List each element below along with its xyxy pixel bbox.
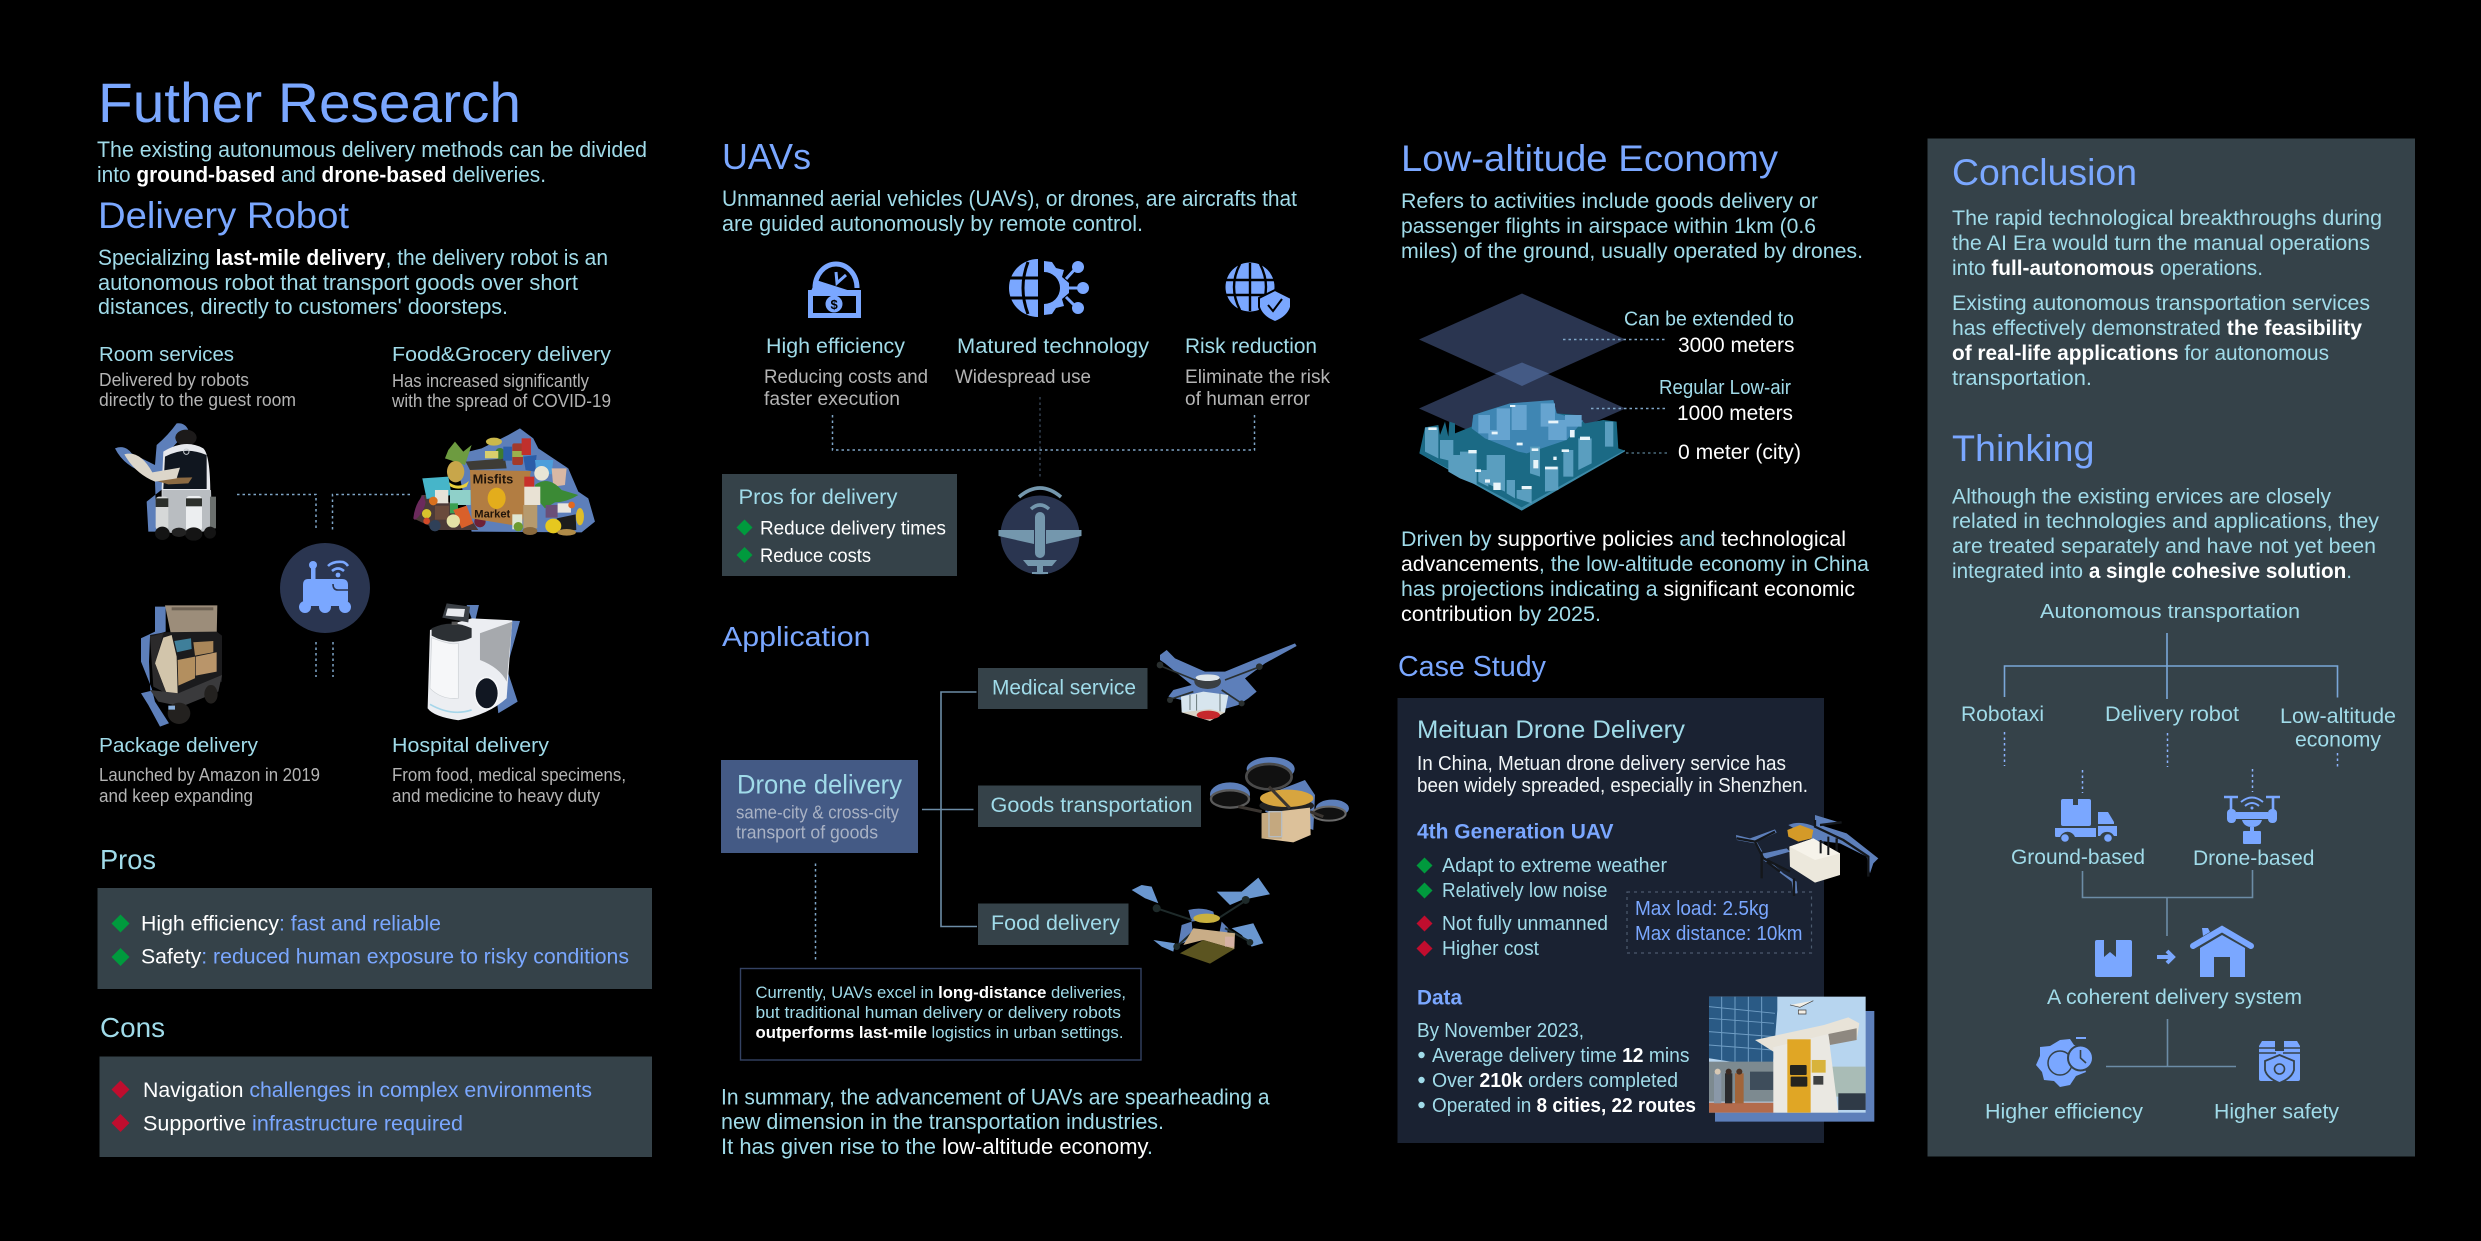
box: medical service: Medical service — [992, 676, 1136, 700]
panel: low-altitude economy column — [1398, 138, 1878, 1143]
label: food and grocery delivery: Food&Grocery delivery — [392, 343, 612, 366]
summary text: new dimension in the transportation industries. — [721, 1109, 1164, 1134]
list: data: Average delivery time 12 mins — [1432, 1045, 1690, 1067]
image: medical drone — [1157, 643, 1297, 721]
image: hospital delivery robot — [428, 603, 520, 720]
feature: risk reduction — [1185, 335, 1330, 410]
conclusion text: of real-life applications for autonomous — [1952, 341, 2329, 365]
image: goods drone — [1210, 757, 1349, 842]
conclusion text — [1952, 206, 2382, 390]
summary text: In summary, the advancement of UAVs are spearheading a — [721, 1084, 1270, 1110]
label: room services: Room services — [99, 343, 234, 366]
feature: high efficiency: faster execution — [764, 389, 900, 410]
list: data — [1417, 1020, 1696, 1117]
image: grocery pile: Misfits — [473, 472, 513, 486]
label: higher safety: Higher safety — [2214, 1100, 2339, 1124]
thinking text: Although the existing ervices are closely — [1952, 484, 2331, 508]
summary text: It has given rise to the low-altitude economy. — [721, 1134, 1153, 1159]
economy outlook text: has projections indicating a significant economic — [1401, 577, 1855, 601]
callout: last-mile note — [740, 968, 1141, 1060]
icon: drone-based — [2224, 797, 2280, 844]
icon: plane in circle — [998, 488, 1082, 574]
conclusion text: the AI Era would turn the manual operations — [1952, 231, 2370, 255]
intro text: into ground-based and drone-based deliveries. — [97, 162, 546, 187]
panel: cons list — [100, 1056, 652, 1157]
city model — [1419, 400, 1625, 511]
UAV description — [722, 186, 1297, 236]
panel: pros list: High efficiency: fast and reliable — [141, 912, 441, 936]
label: hospital delivery: Hospital delivery — [392, 734, 550, 757]
label: higher efficiency: Higher efficiency — [1985, 1100, 2144, 1124]
conclusion text: The rapid technological breakthroughs during — [1952, 206, 2382, 230]
label: ground-based: Ground-based — [2011, 846, 2145, 869]
box: goods transportation: Goods transportation — [990, 794, 1192, 817]
label: food and grocery delivery: Has increased significantly — [392, 371, 589, 391]
connectors: system to outcomes — [2106, 1019, 2236, 1066]
UAV description: are guided autonomously by remote control. — [722, 211, 1143, 236]
label: food and grocery delivery — [391, 343, 612, 411]
panel: cons list: Navigation challenges in complex environments — [143, 1078, 592, 1102]
feature: high efficiency — [764, 335, 928, 410]
image: room service robot — [115, 423, 216, 541]
panel: pros list — [98, 888, 652, 989]
low-altitude definition: passenger flights in airspace within 1km (0.6 — [1401, 214, 1816, 238]
icon: box to home — [2095, 928, 2251, 977]
list: data: By November 2023, — [1417, 1020, 1584, 1042]
box: medical service — [978, 668, 1148, 709]
label: 3000 meters — [1624, 308, 1794, 357]
label: 3000 meters: Can be extended to — [1624, 308, 1794, 330]
box: drone delivery: same-city & cross-city — [736, 802, 899, 822]
callout: last-mile note: outperforms last-mile logistics in urban settings. — [756, 1023, 1124, 1042]
image: meituan drone — [1736, 815, 1878, 896]
subheading: 4th generation UAV: 4th Generation UAV — [1417, 820, 1614, 844]
label: hospital delivery: and medicine to heavy duty — [392, 786, 600, 806]
heading: pros: Pros — [100, 844, 156, 875]
connectors: service tree — [2004, 633, 2338, 699]
callout: last-mile note: but traditional human delivery or delivery robots — [756, 1003, 1121, 1022]
label: room services — [99, 343, 296, 410]
conclusion text: into full-autonomous operations. — [1952, 256, 2263, 280]
icon: higher efficiency gear — [2036, 1038, 2093, 1087]
callout: max load and distance — [1627, 892, 1812, 953]
connectors: services to categories — [2004, 732, 2338, 793]
label: package delivery: Package delivery — [99, 734, 259, 757]
connectors: features to plane — [832, 397, 1254, 477]
label: package delivery: and keep expanding — [99, 786, 253, 806]
panel: conclusion and thinking — [1928, 138, 2415, 1156]
icon: high efficiency: $ — [830, 297, 838, 312]
label: hospital delivery: From food, medical specimens, — [392, 765, 626, 785]
list: UAV pros and cons — [1416, 855, 1667, 960]
label: robotaxi: Robotaxi — [1961, 703, 2044, 726]
panel: pros for delivery: Pros for delivery — [738, 486, 898, 509]
label: 1000 meters: Regular Low-air — [1659, 376, 1791, 399]
heading: application: Application — [722, 621, 870, 652]
image: delivery station photo — [1709, 997, 1874, 1122]
image: grocery pile — [413, 428, 595, 536]
feature: matured technology: Matured technology — [957, 335, 1150, 358]
image: grocery pile: Market — [474, 508, 511, 520]
economy outlook text: contribution by 2025. — [1401, 602, 1601, 626]
box: goods transportation — [978, 786, 1201, 827]
connectors: robots to center icon — [237, 494, 410, 677]
conclusion text: has effectively demonstrated the feasibility — [1952, 316, 2362, 340]
economy outlook text: advancements, the low-altitude economy in China — [1401, 552, 1869, 576]
intro text: The existing autonumous delivery methods can be divided — [97, 137, 647, 162]
case study intro — [1417, 753, 1808, 797]
icon: risk reduction — [1226, 262, 1291, 322]
heading: case study: Case Study — [1398, 651, 1546, 683]
label: drone-based: Drone-based — [2193, 847, 2314, 870]
feature: high efficiency: Reducing costs and — [764, 367, 928, 388]
thinking text: are treated separately and have not yet been — [1952, 534, 2376, 558]
case study heading: Meituan Drone Delivery — [1417, 716, 1686, 744]
feature: risk reduction: Eliminate the risk — [1185, 367, 1330, 388]
heading: thinking: Thinking — [1952, 428, 2094, 469]
economy outlook text — [1401, 527, 1869, 626]
panel: pros for delivery — [722, 474, 957, 576]
list: data: Operated in 8 cities, 22 routes — [1432, 1095, 1696, 1117]
box: drone delivery — [721, 760, 918, 853]
thinking text — [1952, 484, 2379, 583]
panel: delivery robot column — [97, 71, 652, 1157]
label: room services: directly to the guest room — [99, 390, 296, 410]
feature: matured technology — [955, 335, 1150, 388]
economy outlook text: Driven by supportive policies and technological — [1401, 527, 1846, 551]
conclusion text: Existing autonomous transportation services — [1952, 291, 2370, 315]
intro text — [97, 137, 647, 187]
list: UAV pros and cons: Not fully unmanned — [1442, 913, 1608, 935]
conclusion text: transportation. — [1952, 366, 2092, 390]
panel: UAVs column — [721, 136, 1349, 1159]
list: data: Over 210k orders completed — [1432, 1070, 1678, 1092]
icon: delivery robot circle — [280, 543, 370, 633]
heading: UAVs: UAVs — [722, 136, 811, 177]
delivery robot description — [98, 245, 608, 319]
summary text — [721, 1084, 1270, 1159]
label: coherent delivery system: A coherent delivery system — [2047, 986, 2302, 1009]
label: low-altitude economy — [2280, 705, 2396, 752]
low-altitude definition: miles) of the ground, usually operated by drones. — [1401, 239, 1863, 263]
image: package delivery robot — [141, 605, 222, 727]
heading: conclusion: Conclusion — [1952, 152, 2137, 193]
chart: altitude layers — [1419, 294, 1626, 511]
label: room services: Delivered by robots — [99, 370, 249, 390]
connectors: drone delivery tree — [922, 692, 977, 926]
low-altitude definition: Refers to activities include goods delivery or — [1401, 189, 1818, 213]
list: UAV pros and cons: Adapt to extreme weather — [1442, 855, 1667, 877]
low-altitude definition — [1401, 189, 1863, 263]
diagram: autonomous transportation: Autonomous transportation — [2040, 601, 2300, 623]
icon: higher safety — [2259, 1041, 2300, 1083]
icon: ground-based truck — [2055, 799, 2117, 842]
panel: pros for delivery: Reduce costs — [760, 545, 871, 567]
box: food delivery — [978, 904, 1128, 945]
heading: cons: Cons — [100, 1012, 165, 1043]
panel: pros for delivery: Reduce delivery times — [760, 518, 946, 540]
label: 3000 meters: 3000 meters — [1678, 334, 1794, 357]
label: package delivery — [99, 734, 320, 806]
delivery robot description: autonomous robot that transport goods over short — [98, 270, 578, 295]
feature: matured technology: Widespread use — [955, 367, 1091, 388]
connectors: altitude labels — [1563, 340, 1670, 453]
delivery robot description: Specializing last-mile delivery, the delivery robot is an — [98, 245, 608, 270]
icon: matured technology — [1009, 259, 1089, 317]
image: food drone — [1132, 878, 1270, 964]
box: drone delivery: Drone delivery — [737, 770, 902, 800]
thinking text: integrated into a single cohesive solution. — [1952, 559, 2352, 583]
label: 1000 meters: 1000 meters — [1677, 402, 1793, 425]
feature: high efficiency: High efficiency — [766, 335, 906, 358]
panel: meituan case study — [1398, 698, 1878, 1143]
box: drone delivery: transport of goods — [736, 822, 878, 842]
label: 1000 meters — [1659, 376, 1793, 425]
panel: pros list: Safety: reduced human exposure to risky conditions — [141, 944, 629, 968]
feature: risk reduction: of human error — [1185, 389, 1311, 410]
label: hospital delivery — [392, 734, 626, 806]
title: Futher Research — [98, 71, 521, 134]
case study intro: In China, Metuan drone delivery service has — [1417, 753, 1786, 775]
label: delivery robot: Delivery robot — [2105, 703, 2239, 726]
connector: drone delivery to note — [814, 864, 816, 961]
callout: max load and distance: Max distance: 10km — [1635, 923, 1802, 945]
heading: low-altitude economy: Low-altitude Economy — [1401, 138, 1779, 179]
callout: last-mile note: Currently, UAVs excel in long-distance deliveries, — [756, 983, 1126, 1002]
icon: high efficiency — [808, 264, 861, 318]
subheading: data: Data — [1417, 986, 1462, 1010]
panel: cons list: Supportive infrastructure required — [143, 1112, 463, 1136]
UAV description: Unmanned aerial vehicles (UAVs), or drones, are aircrafts that — [722, 186, 1297, 211]
list: UAV pros and cons: Higher cost — [1442, 938, 1539, 960]
label: food and grocery delivery: with the spread of COVID-19 — [391, 391, 611, 411]
list: UAV pros and cons: Relatively low noise — [1442, 880, 1608, 902]
label: 0 meter: 0 meter (city) — [1678, 441, 1801, 464]
label: low-altitude economy: economy — [2295, 728, 2381, 752]
label: low-altitude economy: Low-altitude — [2280, 705, 2396, 728]
case study intro: been widely spreaded, especially in Shenzhen. — [1417, 775, 1808, 797]
heading: delivery robot: Delivery Robot — [98, 195, 350, 236]
delivery robot description: distances, directly to customers' doorsteps. — [98, 294, 508, 319]
feature: risk reduction: Risk reduction — [1185, 335, 1317, 358]
thinking text: related in technologies and applications, they — [1952, 509, 2379, 533]
callout: max load and distance: Max load: 2.5kg — [1635, 898, 1769, 920]
box: food delivery: Food delivery — [991, 912, 1121, 935]
connectors: categories to system — [2082, 870, 2252, 936]
label: package delivery: Launched by Amazon in 2019 — [99, 765, 320, 785]
